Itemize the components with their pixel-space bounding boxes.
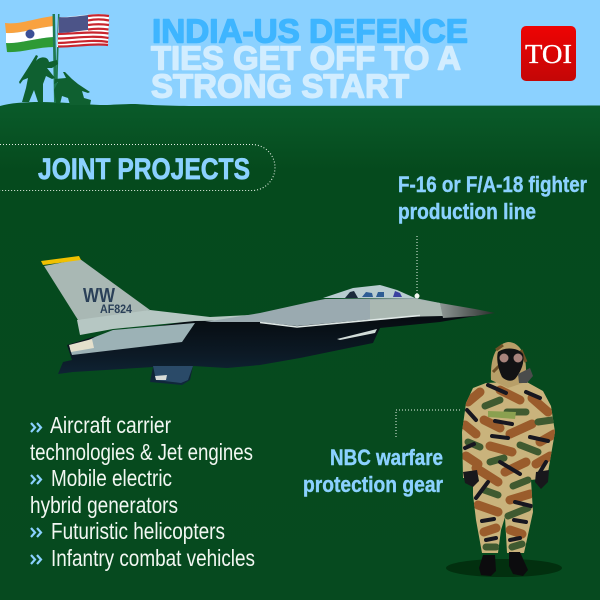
item: generators xyxy=(30,465,178,518)
list: joint project items xyxy=(30,412,255,571)
gas mask xyxy=(497,348,524,381)
illustration: soldier in NBC suit xyxy=(446,342,562,577)
illustration: fighter jet: AF824 xyxy=(100,302,132,316)
item: aircraft carrier: technologies & Jet engines xyxy=(30,439,253,465)
jet wing and flank xyxy=(70,323,195,355)
jet canopy xyxy=(323,285,415,298)
title xyxy=(151,14,468,106)
left glove xyxy=(463,470,479,487)
background: sky xyxy=(0,0,600,110)
title line 3: STRONG START xyxy=(151,68,410,106)
arrow: dotted leader to jet xyxy=(414,236,420,298)
dotted pill outline xyxy=(0,144,275,190)
label: F-16 production line: production line xyxy=(398,199,536,224)
heading: JOINT PROJECTS xyxy=(38,153,250,186)
icon: kneeling soldier xyxy=(54,72,91,105)
item: aircraft carrier xyxy=(30,412,253,465)
item: generators: Mobile electric xyxy=(51,465,172,491)
right boot xyxy=(509,552,528,576)
title line 2: TIES GET OFF TO A xyxy=(151,40,461,78)
item: aircraft carrier: Aircraft carrier xyxy=(50,412,171,438)
label: NBC warfare protection gear: NBC warfare xyxy=(330,445,443,470)
item: helicopters: Futuristic helicopters xyxy=(51,518,225,544)
jet forward fuselage xyxy=(205,298,443,326)
icon: flags and soldiers xyxy=(5,14,109,105)
suit hood xyxy=(491,342,526,388)
arrow: dotted leader to suit xyxy=(396,410,462,437)
icon: TOI logo: TOI xyxy=(525,39,572,69)
suit camouflage xyxy=(462,382,555,553)
illustration: fighter jet xyxy=(41,256,495,385)
label: F-16 production line xyxy=(398,172,587,224)
ground shadow xyxy=(446,559,562,577)
panel: joint projects heading xyxy=(0,144,275,190)
label: NBC warfare protection gear xyxy=(303,445,443,497)
icon: Indian flag xyxy=(5,16,54,52)
icon: standing soldier xyxy=(19,55,58,102)
item: combat vehicles: Infantry combat vehicles xyxy=(51,545,255,571)
icon: flag pole xyxy=(52,14,57,103)
right glove xyxy=(535,470,549,489)
jet tail fin xyxy=(44,259,150,320)
jet belly xyxy=(58,313,493,385)
icon: TOI logo xyxy=(521,26,576,81)
jet nose cone xyxy=(440,303,495,318)
item: generators: hybrid generators xyxy=(30,492,178,518)
jet rear fuselage xyxy=(77,310,270,335)
jet tail tip xyxy=(41,256,81,265)
jet ventral fin xyxy=(153,366,193,383)
jet intake lip xyxy=(337,329,377,340)
jet nozzle xyxy=(69,339,94,352)
icon: US flag xyxy=(57,14,109,47)
left boot xyxy=(479,555,496,576)
chest patch xyxy=(488,411,516,419)
tail code: WW xyxy=(83,285,115,307)
label: NBC warfare protection gear: protection gear xyxy=(303,472,443,497)
mask filter xyxy=(518,368,533,383)
title line 1: INDIA-US DEFENCE xyxy=(152,14,468,50)
